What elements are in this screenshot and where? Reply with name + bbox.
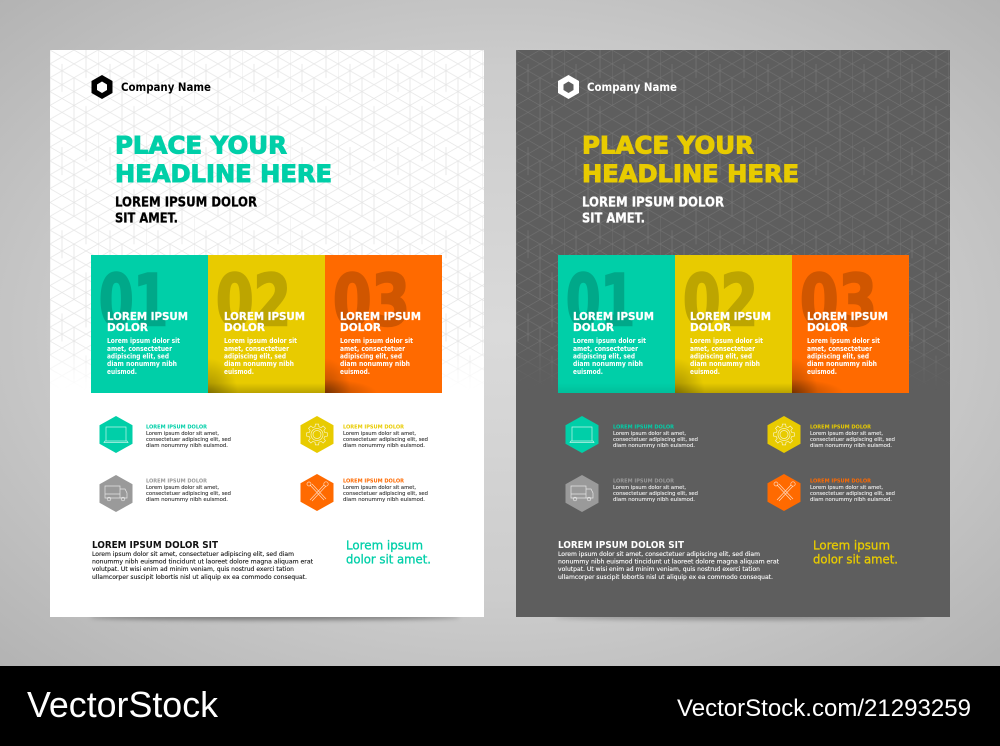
feature: truck: [100, 475, 231, 512]
subheadline: SIT AMET.: [115, 210, 178, 226]
card 01: amet, consectetuer: [107, 345, 172, 353]
card 03: LOREM IPSUM: [340, 310, 421, 323]
card 01: amet, consectetuer: [573, 345, 638, 353]
footer text block: LOREM IPSUM DOLOR SIT: [92, 540, 218, 551]
feature: truck: [566, 475, 698, 512]
feature: gear: diam nonummy nibh euismod.: [810, 443, 892, 449]
watermark bar: [0, 666, 1000, 746]
paper shadow: dark flyer: [555, 614, 925, 620]
footer text block: volutpat. Ut wisi enim ad minim veniam, quis nostrud exerci tation: [558, 566, 760, 573]
card 01: 01: [99, 260, 168, 342]
feature: truck: diam nonummy nibh euismod.: [146, 497, 228, 503]
feature: tools: diam nonummy nibh euismod.: [810, 497, 892, 503]
callout: dolor sit amet.: [813, 552, 898, 566]
feature: laptop: diam nonummy nibh euismod.: [146, 443, 228, 449]
subheadline: LOREM IPSUM DOLOR: [115, 194, 257, 210]
card 03: Lorem ipsum dolor sit: [807, 337, 881, 345]
subheadline: [582, 194, 724, 226]
logo: company: [92, 75, 211, 99]
card 02: adipiscing elit, sed: [690, 352, 752, 360]
footer text block: [92, 540, 314, 581]
panel: dark flyer: [516, 50, 950, 617]
card 01: [91, 255, 208, 393]
feature: laptop: LOREM IPSUM DOLOR: [613, 424, 674, 430]
feature: laptop: [566, 416, 698, 453]
feature: laptop: Lorem ipsum dolor sit amet,: [146, 431, 219, 437]
feature: tools: [300, 474, 428, 511]
card 02: 02: [683, 260, 758, 342]
card 02: Lorem ipsum dolor sit: [224, 337, 298, 345]
feature: truck: LOREM IPSUM DOLOR: [146, 479, 207, 485]
card 01: [558, 255, 675, 393]
card 01: DOLOR: [573, 321, 615, 334]
feature: gear: Lorem ipsum dolor sit amet,: [810, 431, 883, 437]
card 03: 03: [800, 260, 877, 342]
card 01: diam nonummy nibh: [107, 360, 177, 368]
card 02: LOREM IPSUM: [690, 310, 771, 323]
card 02: DOLOR: [690, 321, 732, 334]
card 02: adipiscing elit, sed: [224, 352, 286, 360]
card 03: [325, 255, 442, 393]
logo: company: Company Name: [121, 80, 211, 94]
feature: tools: Lorem ipsum dolor sit amet,: [343, 485, 416, 491]
card 03: DOLOR: [807, 321, 849, 334]
card 02: [208, 255, 325, 393]
card 03: diam nonummy nibh: [807, 360, 877, 368]
footer text block: ullamcorper suscipit lobortis nisl ut aliquip ex ea commodo consequat.: [92, 574, 307, 581]
footer text block: nonummy nibh euismod tincidunt ut laoreet dolore magna aliquam erat: [92, 558, 314, 566]
headline: HEADLINE HERE: [115, 160, 332, 188]
callout: Lorem ipsum: [813, 538, 890, 552]
feature: tools: consectetuer adipiscing elit, sed: [810, 491, 895, 497]
card 01: adipiscing elit, sed: [107, 352, 169, 360]
feature: gear: Lorem ipsum dolor sit amet,: [343, 431, 416, 437]
card 01: LOREM IPSUM: [107, 310, 188, 323]
callout: Lorem ipsum: [346, 538, 423, 552]
footer text block: Lorem ipsum dolor sit amet, consectetuer adipiscing elit, sed diam: [558, 551, 760, 558]
callout: [813, 538, 898, 566]
feature: gear: [300, 416, 428, 453]
footer text block: volutpat. Ut wisi enim ad minim veniam, quis nostrud exerci tation: [92, 566, 294, 573]
card 01: Lorem ipsum dolor sit: [573, 337, 647, 345]
card 02: [675, 255, 792, 393]
feature: gear: [768, 416, 895, 453]
card 03: Lorem ipsum dolor sit: [340, 337, 414, 345]
card 02: 02: [216, 260, 291, 342]
card 01: adipiscing elit, sed: [573, 352, 635, 360]
paper shadow: light flyer: [90, 614, 460, 620]
card 02: LOREM IPSUM: [224, 310, 305, 323]
card 02: DOLOR: [224, 321, 266, 334]
feature: tools: Lorem ipsum dolor sit amet,: [810, 485, 883, 491]
footer text block: nonummy nibh euismod tincidunt ut laoreet dolore magna aliquam erat: [558, 558, 780, 566]
card 03: amet, consectetuer: [807, 345, 872, 353]
feature: tools: diam nonummy nibh euismod.: [343, 497, 425, 503]
callout: dolor sit amet.: [346, 552, 431, 566]
feature: laptop: LOREM IPSUM DOLOR: [146, 424, 207, 430]
feature: tools: [768, 474, 895, 511]
card 01: 01: [566, 260, 635, 342]
card 01: euismod.: [107, 368, 137, 376]
logo: company: [558, 75, 677, 99]
headline: [582, 132, 799, 188]
feature: gear: diam nonummy nibh euismod.: [343, 443, 425, 449]
headline: PLACE YOUR: [582, 132, 754, 160]
card 01: DOLOR: [107, 321, 149, 334]
headline: PLACE YOUR: [115, 132, 287, 160]
feature: gear: LOREM IPSUM DOLOR: [810, 424, 871, 430]
feature: gear: consectetuer adipiscing elit, sed: [810, 437, 895, 443]
feature: laptop: Lorem ipsum dolor sit amet,: [613, 431, 686, 437]
watermark bar: VectorStock: [27, 684, 219, 725]
feature: gear: LOREM IPSUM DOLOR: [343, 424, 404, 430]
feature: tools: LOREM IPSUM DOLOR: [810, 479, 871, 485]
card 02: Lorem ipsum dolor sit: [690, 337, 764, 345]
card 03: euismod.: [807, 368, 837, 376]
feature: truck: Lorem ipsum dolor sit amet,: [146, 485, 219, 491]
card 03: adipiscing elit, sed: [340, 352, 402, 360]
feature: truck: consectetuer adipiscing elit, sed: [613, 491, 698, 497]
card 01: LOREM IPSUM: [573, 310, 654, 323]
card 03: diam nonummy nibh: [340, 360, 410, 368]
headline: HEADLINE HERE: [582, 160, 799, 188]
card 01: Lorem ipsum dolor sit: [107, 337, 181, 345]
subheadline: SIT AMET.: [582, 210, 645, 226]
feature: laptop: consectetuer adipiscing elit, sed: [613, 437, 698, 443]
card 02: amet, consectetuer: [690, 345, 755, 353]
feature: laptop: diam nonummy nibh euismod.: [613, 443, 695, 449]
card 03: adipiscing elit, sed: [807, 352, 869, 360]
footer text block: ullamcorper suscipit lobortis nisl ut aliquip ex ea commodo consequat.: [558, 574, 773, 581]
card 03: amet, consectetuer: [340, 345, 405, 353]
card 02: diam nonummy nibh: [224, 360, 294, 368]
feature: laptop: consectetuer adipiscing elit, sed: [146, 437, 231, 443]
footer text block: Lorem ipsum dolor sit amet, consectetuer adipiscing elit, sed diam: [92, 551, 294, 558]
card 03: LOREM IPSUM: [807, 310, 888, 323]
feature: truck: diam nonummy nibh euismod.: [613, 497, 695, 503]
card 01: euismod.: [573, 368, 603, 376]
card 03: 03: [333, 260, 410, 342]
logo: company: Company Name: [587, 80, 677, 94]
feature: tools: LOREM IPSUM DOLOR: [343, 479, 404, 485]
card 03: DOLOR: [340, 321, 382, 334]
card 02: amet, consectetuer: [224, 345, 289, 353]
subheadline: LOREM IPSUM DOLOR: [582, 194, 724, 210]
feature: truck: consectetuer adipiscing elit, sed: [146, 491, 231, 497]
subheadline: [115, 194, 257, 226]
feature: truck: Lorem ipsum dolor sit amet,: [613, 485, 686, 491]
feature: tools: consectetuer adipiscing elit, sed: [343, 491, 428, 497]
card 01: diam nonummy nibh: [573, 360, 643, 368]
footer text block: [558, 540, 780, 581]
card 02: diam nonummy nibh: [690, 360, 760, 368]
card 03: [792, 255, 909, 393]
feature: laptop: [100, 416, 231, 453]
callout: [346, 538, 431, 566]
feature: gear: consectetuer adipiscing elit, sed: [343, 437, 428, 443]
footer text block: LOREM IPSUM DOLOR SIT: [558, 540, 684, 551]
card 03: euismod.: [340, 368, 370, 376]
watermark bar: VectorStock.com/21293259: [677, 695, 971, 722]
headline: [115, 132, 332, 188]
feature: truck: LOREM IPSUM DOLOR: [613, 479, 674, 485]
card 02: euismod.: [690, 368, 720, 376]
card 02: euismod.: [224, 368, 254, 376]
panel: light flyer: [50, 50, 484, 617]
